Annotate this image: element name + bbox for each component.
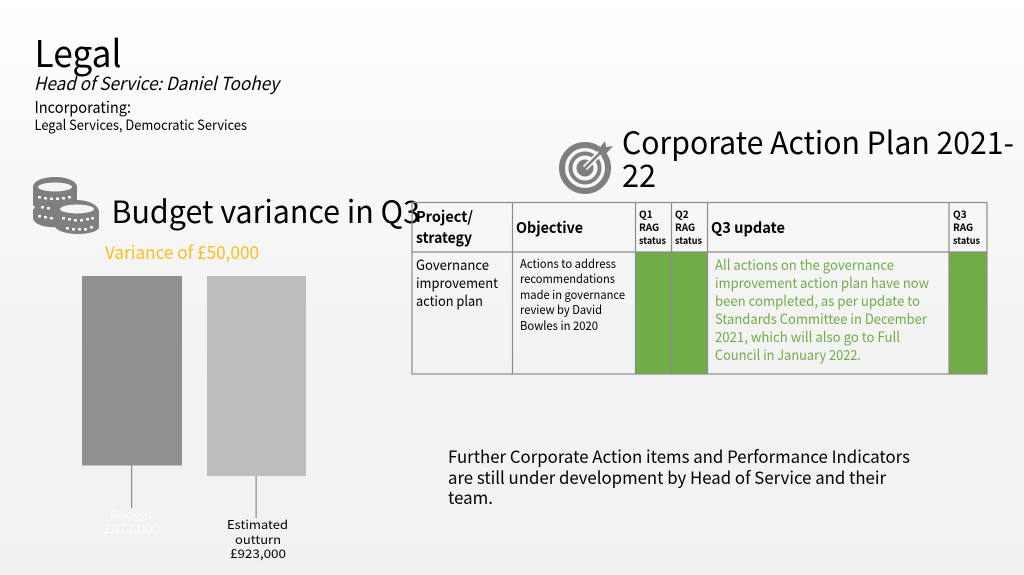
text block: incorporating: Legal Services, Democratic Services <box>34 115 247 135</box>
table header: Q3 update <box>711 217 785 238</box>
table header <box>416 206 980 248</box>
table header: RAG <box>675 219 695 234</box>
table header: status <box>639 232 666 247</box>
title: Legal <box>34 24 122 78</box>
table header: Q2 <box>675 206 689 221</box>
text block: incorporating <box>34 94 247 135</box>
project cell: improvement <box>416 273 499 293</box>
table: corporate action plan <box>412 202 987 374</box>
Q3 update cell: improvement action plan have now <box>715 273 929 293</box>
heading: corporate action plan: Corporate Action Plan 2021- <box>622 118 1014 163</box>
icon: target with arrow <box>562 141 613 191</box>
objective cell: recommendations <box>520 270 615 287</box>
note: further items: are still under development by Head of Service and their <box>448 464 886 489</box>
table header: RAG <box>953 219 973 234</box>
heading: budget variance: Budget variance in Q3 <box>112 187 420 232</box>
table header: Project/ <box>416 206 473 227</box>
note: further items: Further Corporate Action items and Performance Indicators <box>448 443 910 468</box>
bar: budget: Budget <box>110 506 152 523</box>
objective cell: review by David <box>520 301 602 318</box>
table header: status <box>953 232 980 247</box>
table header: Objective <box>516 217 583 238</box>
variance label: Variance of £50,000 <box>105 239 259 265</box>
table header: RAG <box>639 219 659 234</box>
objective cell: made in governance <box>520 286 625 303</box>
RAG status cells <box>635 252 987 374</box>
Q3 update cell: been completed, as per update to <box>715 291 920 311</box>
table header: status <box>675 232 702 247</box>
icon: coins <box>33 177 99 234</box>
Q3 update cell: Council in January 2022. <box>715 345 861 365</box>
bar: estimated outturn: Estimated <box>227 516 288 533</box>
bar: budget <box>82 276 182 537</box>
objective cell: Bowles in 2020 <box>520 317 598 334</box>
table header: Q1 <box>639 206 653 221</box>
Q3 update cell: All actions on the governance <box>715 255 894 275</box>
project cell: action plan <box>416 291 483 311</box>
project cell: Governance <box>416 255 489 275</box>
subtitle: head of service: Head of Service: Daniel Toohey <box>34 70 281 96</box>
Q3 update cell: Standards Committee in December <box>715 309 928 329</box>
table grid <box>412 202 987 374</box>
note: further items: team. <box>448 484 493 509</box>
Q3 update cell: 2021, which will also go to Full <box>715 327 900 347</box>
table header: strategy <box>416 227 472 248</box>
bar: estimated outturn: £923,000 <box>230 545 286 562</box>
text block: incorporating: Incorporating: <box>34 94 131 118</box>
bar: estimated outturn: outturn <box>235 531 281 548</box>
objective cell: Actions to address <box>520 255 616 272</box>
bar chart <box>82 276 306 562</box>
bar: estimated outturn <box>207 276 306 562</box>
table header: Q3 <box>953 206 967 221</box>
heading: corporate action plan: 22 <box>622 151 656 196</box>
bar: budget: £873,000 <box>104 520 160 537</box>
